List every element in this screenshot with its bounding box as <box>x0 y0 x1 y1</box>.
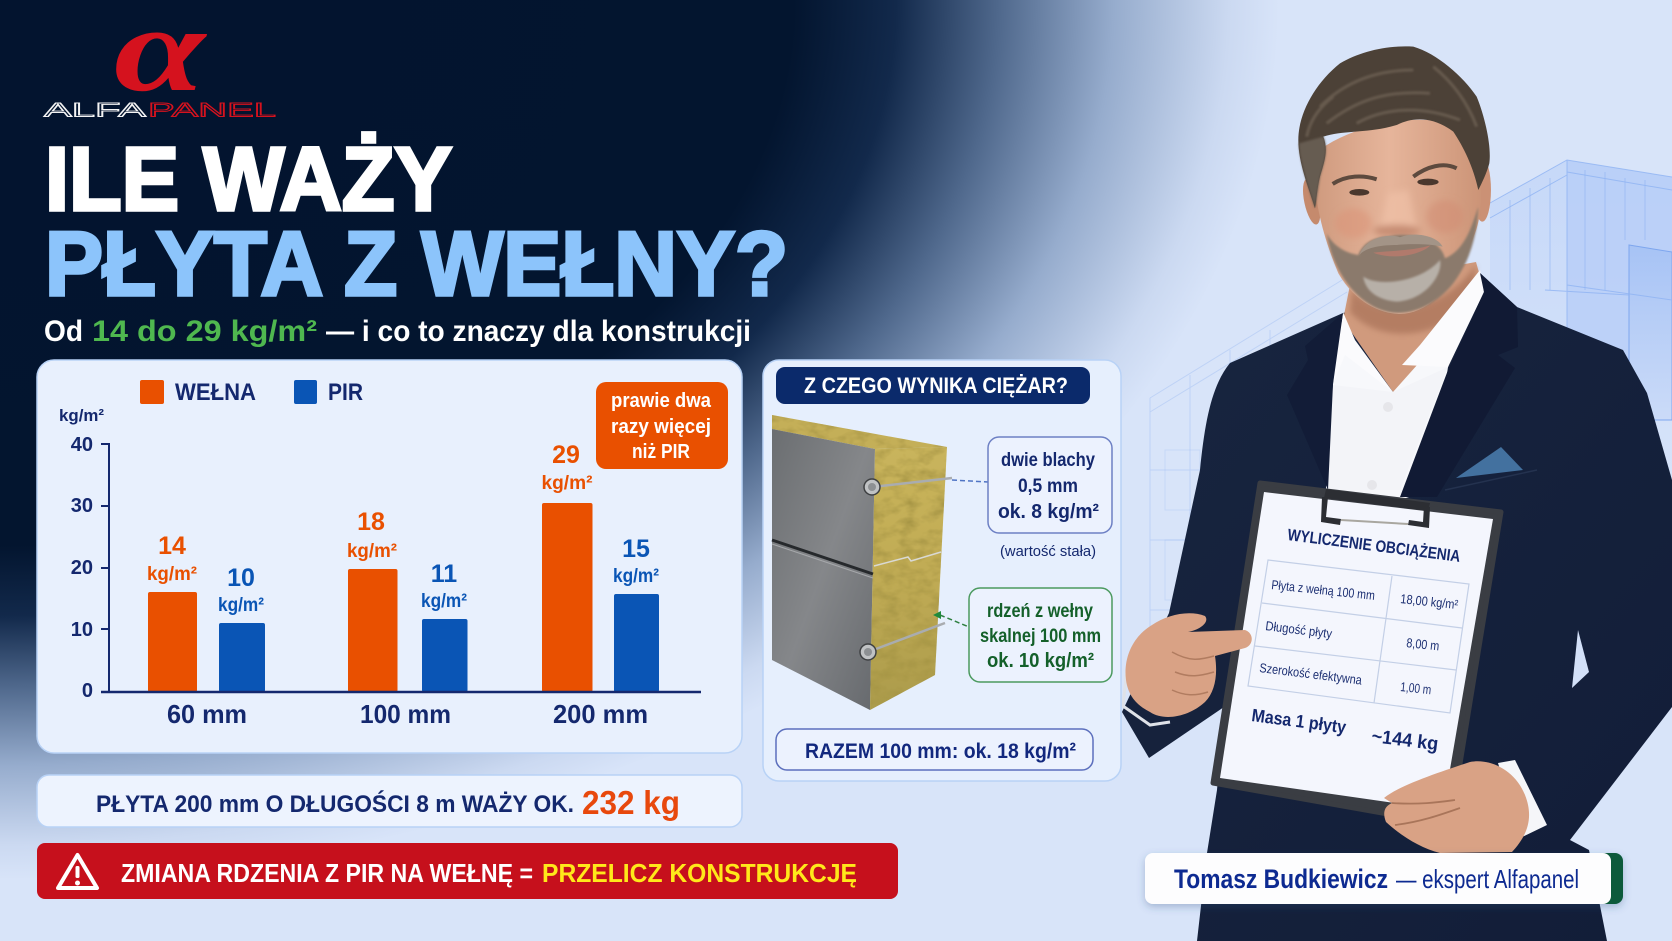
composition heading <box>776 367 1090 404</box>
pointing hand <box>1126 613 1252 717</box>
chin beard <box>1363 260 1440 302</box>
strip: 232 kg <box>37 775 742 827</box>
legend: WEŁNA <box>175 379 256 406</box>
neck shadow <box>1350 265 1476 334</box>
leader blue <box>952 480 988 482</box>
expert role: — ekspert Alfapanel <box>1396 864 1579 894</box>
shirt front <box>1326 367 1448 490</box>
ear left <box>1300 177 1324 226</box>
building line drawing <box>1150 160 1672 700</box>
callout: core <box>969 588 1112 682</box>
holding hand <box>1384 761 1529 853</box>
y axis: 20 <box>71 557 93 579</box>
value labels <box>147 441 659 616</box>
total box: RAZEM 100 mm: ok. 18 kg/m² <box>805 739 1076 763</box>
value labels: kg/m² <box>613 566 659 587</box>
x axis labels: 200 mm <box>553 699 648 729</box>
collar left <box>1333 312 1393 392</box>
title line 2: PŁYTA Z WEŁNY? <box>45 214 788 315</box>
value labels: kg/m² <box>421 591 467 612</box>
callout: nearly double: niż PIR <box>632 441 690 463</box>
bars 60 mm <box>148 592 265 692</box>
load table: Płyta z wełną 100 mm <box>1271 577 1376 603</box>
value labels: kg/m² <box>147 564 197 585</box>
value labels: 15 <box>622 535 650 563</box>
x axis <box>101 691 701 693</box>
lapel left <box>1287 313 1343 490</box>
sandwich panel illustration <box>772 415 952 710</box>
strip: 232 kg: 232 kg <box>582 784 680 821</box>
load table: 18,00 kg/m² <box>1400 591 1459 612</box>
hair side grey <box>1299 137 1326 208</box>
icon: warning triangle <box>58 855 97 888</box>
note constant value: (wartość stała) <box>1000 543 1096 560</box>
chart card <box>37 360 742 753</box>
warning bar: ZMIANA RDZENIA Z PIR NA WEŁNĘ = <box>121 858 533 888</box>
suit body <box>1122 273 1672 941</box>
presenter photo illustration <box>1122 46 1672 941</box>
logo <box>44 0 276 122</box>
clip <box>1321 489 1430 528</box>
panel: bar chart <box>37 360 742 753</box>
bars 100 mm <box>348 569 468 692</box>
callout: core: ok. 10 kg/m² <box>987 650 1094 672</box>
mass value: ~144 kg <box>1370 726 1439 755</box>
left cuff <box>1123 668 1170 725</box>
value labels: 10 <box>227 564 255 592</box>
face <box>1314 120 1481 314</box>
load table: 8,00 m <box>1406 635 1440 653</box>
y axis: 10 <box>71 619 93 641</box>
callout: sheets <box>988 437 1112 533</box>
composition card <box>763 360 1121 781</box>
logo wordmark alfa: ALFA <box>44 100 147 122</box>
y axis: 0 <box>82 680 93 702</box>
panel: weight composition <box>763 360 1121 781</box>
callout: sheets: dwie blachy <box>1001 450 1095 471</box>
subtitle: 14 do 29 kg/m² <box>92 315 317 348</box>
neck <box>1343 262 1484 392</box>
beard <box>1327 207 1478 313</box>
mass label: Masa 1 płyty <box>1250 705 1347 737</box>
load table <box>1248 560 1469 713</box>
legend: PIR <box>328 379 363 406</box>
y axis unit: kg/m² <box>59 406 104 425</box>
load table: Długość płyty <box>1265 618 1333 641</box>
green tab <box>1590 853 1623 904</box>
callout: sheets: 0,5 mm <box>1018 476 1078 497</box>
cheek shadows <box>1335 190 1463 238</box>
strip: 232 kg: PŁYTA 200 mm O DŁUGOŚCI 8 m WAŻY OK. <box>96 790 574 818</box>
logo wordmark panel: PANEL <box>148 100 276 122</box>
clipboard <box>1213 483 1501 825</box>
callout: core: rdzeń z wełny <box>987 601 1093 622</box>
callout: nearly double: razy więcej <box>611 416 711 438</box>
hair <box>1298 46 1490 208</box>
callout: core: skalnej 100 mm <box>980 626 1101 647</box>
torso gap <box>1572 630 1589 688</box>
y axis: 30 <box>71 495 93 517</box>
y axis <box>71 434 109 702</box>
composition heading: Z CZEGO WYNIKA CIĘŻAR? <box>804 373 1068 398</box>
value labels: kg/m² <box>218 595 264 616</box>
clipboard title: WYLICZENIE OBCIĄŻENIA <box>1286 526 1461 566</box>
clipboard board <box>1213 483 1501 825</box>
head <box>1298 46 1491 314</box>
x axis labels <box>167 699 648 729</box>
title line 1: ILE WAŻY <box>45 130 452 230</box>
leader green <box>940 615 969 627</box>
expert name: Tomasz Budkiewicz <box>1174 864 1388 894</box>
load table: Szerokość efektywna <box>1259 660 1363 688</box>
callout: nearly double: prawie dwa <box>611 390 712 412</box>
x axis labels: 60 mm <box>167 699 247 729</box>
value labels: kg/m² <box>347 541 397 562</box>
load table: 1,00 m <box>1400 679 1432 697</box>
white tag <box>1145 853 1611 904</box>
subtitle <box>44 315 751 348</box>
ear right <box>1474 158 1491 222</box>
value labels: 29 <box>552 441 580 469</box>
warning bar: PRZELICZ KONSTRUKCJĘ <box>542 858 857 888</box>
value labels: 11 <box>431 560 457 588</box>
value labels: 14 <box>158 532 186 560</box>
callout: nearly double <box>596 382 728 469</box>
legend <box>140 379 363 406</box>
moustache <box>1359 235 1443 255</box>
warning bar <box>37 843 898 899</box>
eyes <box>1333 165 1457 196</box>
collar right <box>1402 270 1484 367</box>
pocket square <box>1456 447 1523 478</box>
pocket <box>1445 470 1537 490</box>
mouth <box>1373 245 1431 256</box>
x axis labels: 100 mm <box>360 699 451 729</box>
paper <box>1220 492 1493 810</box>
value labels: 18 <box>357 508 385 536</box>
callout: sheets: ok. 8 kg/m² <box>998 501 1099 523</box>
hair strands <box>1307 67 1477 137</box>
y axis: 40 <box>71 434 93 456</box>
subtitle: — i co to znaczy dla konstrukcji <box>326 315 751 348</box>
name tag <box>1145 853 1623 904</box>
subtitle: Od <box>44 315 83 348</box>
value labels: kg/m² <box>542 473 592 494</box>
total box <box>776 729 1093 770</box>
bars 200 mm <box>542 503 659 692</box>
shirt <box>1326 270 1484 500</box>
shirt buttons <box>1367 402 1393 490</box>
lapel right <box>1400 273 1518 497</box>
arrowhead green <box>933 611 941 619</box>
right shirt cuff <box>1498 760 1547 838</box>
